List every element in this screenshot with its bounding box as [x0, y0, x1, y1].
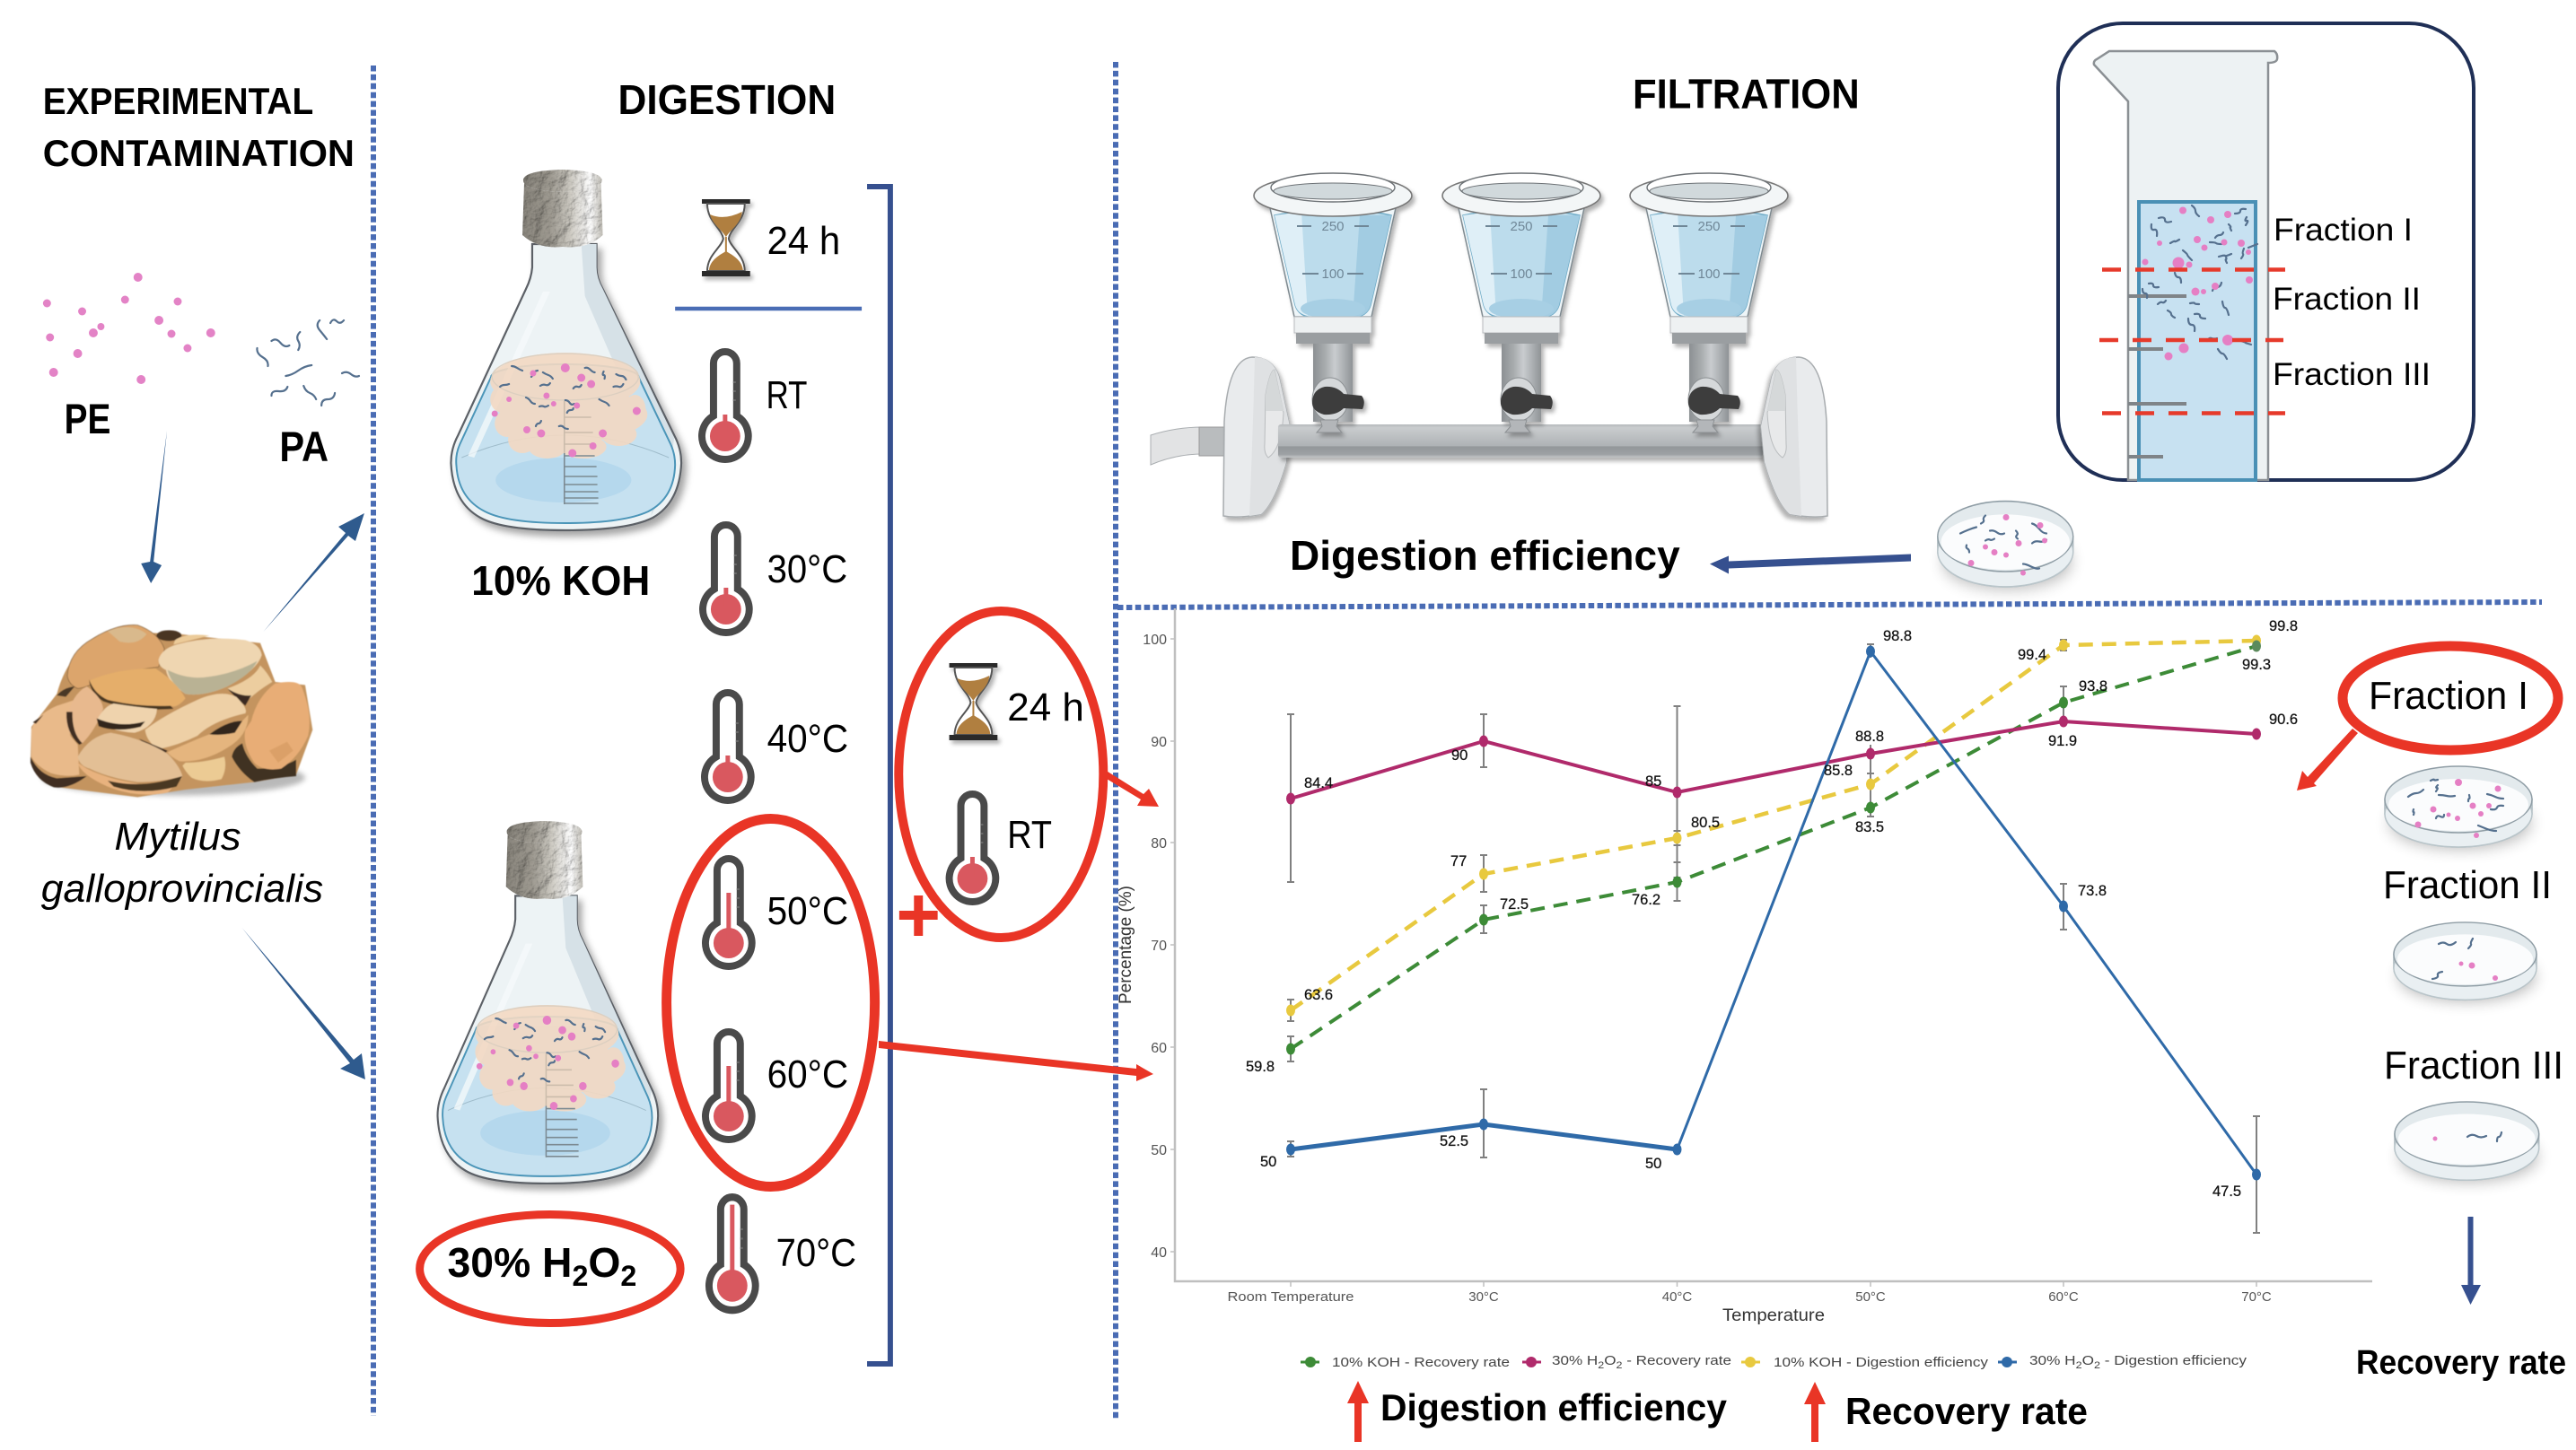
legend: O [2082, 1353, 2094, 1368]
data labels: 52.5 [1440, 1133, 1468, 1149]
icon: red plus [899, 895, 938, 936]
data labels: 47.5 [2212, 1184, 2241, 1200]
data labels: 91.9 [2048, 733, 2077, 749]
callout: 30% H2O2 ellipse: 30% H [447, 1239, 571, 1286]
divider: digestion and filtration [1113, 62, 1118, 1419]
heading: experimental contamination [43, 80, 355, 174]
data labels: 98.8 [1883, 628, 1912, 644]
label: PE: PE [65, 396, 110, 442]
label: Fraction II: Fraction II [2383, 863, 2552, 907]
temperature: 50 C: 50°C [767, 889, 848, 933]
series: 10% KOH digestion efficiency [1286, 635, 2261, 1016]
data labels: 93.8 [2079, 678, 2107, 694]
label: digestion efficiency: Digestion efficiency [1290, 532, 1680, 579]
image: mussels [31, 625, 312, 797]
funnel 2: 100 [1510, 266, 1533, 282]
callout: Fraction I [2343, 646, 2558, 750]
arrow: particles to mussels [141, 431, 167, 583]
data labels: 50 [1260, 1154, 1276, 1170]
heading: filtration: FILTRATION [1633, 70, 1860, 117]
panel: fractions [2297, 646, 2566, 1382]
arrow: mussels to KOH digestion [263, 513, 364, 632]
x axis ticks and labels: 60°C [2048, 1289, 2079, 1305]
label: Fraction I: Fraction I [2274, 213, 2413, 248]
series: 30% H2O2 recovery rate [1286, 716, 2261, 804]
data labels: 99.4 [2018, 647, 2046, 663]
legend: O [1604, 1353, 1617, 1368]
temperature: 40 C: 40°C [767, 717, 848, 761]
y axis ticks and labels: 40 [1151, 1245, 1167, 1261]
funnel 1 [1254, 173, 1412, 432]
data labels: 85.8 [1824, 763, 1853, 779]
temperature: RT [702, 352, 807, 459]
error bars [1287, 640, 2260, 1233]
funnel 1: 250 [1321, 219, 1345, 234]
legend: 10% KOH - Recovery rate [1332, 1355, 1510, 1370]
funnel 1: 100 [1321, 266, 1345, 282]
label: PA: PA [279, 424, 329, 470]
callout: 30% H2O2 ellipse: 2 [572, 1260, 588, 1292]
fraction cut lines [2099, 269, 2285, 413]
y axis ticks and labels: 50 [1151, 1143, 1167, 1158]
y axis ticks and labels: 70 [1151, 939, 1167, 954]
data labels: 99.3 [2242, 657, 2271, 673]
funnel 3 [1630, 173, 1788, 432]
data labels: 59.8 [1246, 1059, 1275, 1075]
dish: Fraction I [2385, 766, 2532, 848]
arrow: Fraction I to chart [2297, 729, 2358, 791]
data labels: 90.6 [2269, 712, 2298, 728]
temperature: 30 C [703, 525, 847, 633]
legend: 2 [1617, 1360, 1623, 1371]
funnel 2 [1442, 173, 1600, 432]
separator under time [675, 307, 862, 310]
legend [1301, 1353, 2247, 1371]
callout: 24 h RT ellipse: 24 h [1007, 686, 1084, 729]
data labels: 85 [1645, 773, 1661, 790]
data labels: 63.6 [1304, 987, 1333, 1003]
y axis ticks and labels: 90 [1151, 735, 1167, 750]
series: 30% H2O2 digestion efficiency [1286, 646, 2261, 1181]
divider: filtration and chart [1117, 602, 2542, 607]
data labels: 83.5 [1855, 819, 1884, 835]
temperature: 30 C: 30°C [767, 547, 847, 591]
label: digestion efficiency increase: Digestion efficiency [1380, 1386, 1728, 1428]
y axis ticks and labels: 80 [1151, 836, 1167, 852]
funnel 2: 250 [1510, 219, 1533, 234]
temperature: 60 C: 60°C [767, 1053, 848, 1096]
PA fibres [257, 319, 359, 406]
flask: 30% H2O2 [438, 821, 658, 1184]
apparatus: filtration manifold [1151, 173, 1827, 517]
x axis ticks and labels: 70°C [2241, 1289, 2272, 1305]
label: Fraction III: Fraction III [2384, 1044, 2563, 1088]
divider: contamination and digestion [371, 66, 376, 1416]
species name: Mytilus [114, 815, 241, 859]
data labels: 88.8 [1855, 729, 1884, 745]
legend: 10% KOH - Digestion efficiency [1774, 1355, 1989, 1370]
funnel 3: 100 [1697, 266, 1721, 282]
data labels: 50 [1645, 1156, 1661, 1172]
data labels [1246, 618, 2298, 1200]
y axis ticks and labels: 100 [1143, 633, 1167, 648]
label: recovery rate: Recovery rate [2356, 1344, 2566, 1382]
data labels: 84.4 [1304, 775, 1333, 791]
series: 10% KOH recovery rate [1286, 641, 2261, 1055]
temperature: 40 C [705, 693, 848, 800]
data labels: 73.8 [2078, 883, 2107, 899]
axes [1175, 608, 2372, 1281]
temperature: RT: RT [767, 373, 807, 417]
y axis ticks and labels: 60 [1151, 1041, 1167, 1056]
callout: 30% H2O2 ellipse: 2 [620, 1260, 636, 1292]
legend: 2 [2094, 1360, 2100, 1371]
dish: Fraction II [2394, 922, 2537, 1000]
y axis title: Percentage (%) [1117, 886, 1135, 1004]
label: recovery rate increase: Recovery rate [1845, 1390, 2088, 1432]
y axis ticks and labels [1143, 633, 1175, 1261]
fibres and particles [2142, 205, 2257, 361]
legend: - Recovery rate [1623, 1353, 1731, 1368]
temperature: 70 C [709, 1197, 856, 1310]
icon: hourglass [702, 199, 750, 276]
heading: experimental contamination: EXPERIMENTAL [43, 80, 313, 122]
legend: 30% H [2029, 1353, 2070, 1368]
arrow: 24 h RT to chart [1102, 770, 1159, 807]
legend: - Digestion efficiency [2100, 1353, 2247, 1368]
temperature: 70 C: 70°C [776, 1231, 856, 1275]
arrow: mussels to H2O2 digestion [242, 928, 365, 1079]
data labels: 77 [1450, 853, 1467, 869]
dish: Fraction III [2395, 1102, 2539, 1181]
x axis ticks and labels: 30°C [1468, 1289, 1499, 1305]
data labels: 72.5 [1500, 896, 1529, 913]
x axis ticks and labels: 40°C [1662, 1289, 1692, 1305]
chart: percentage by temperature [1117, 608, 2372, 1371]
callout: 24 h RT ellipse: RT [1007, 813, 1052, 857]
flask: 10% KOH [451, 170, 681, 530]
legend: 2 [1598, 1360, 1604, 1371]
arrow: 50-60 C to chart [879, 1041, 1153, 1081]
x axis title: Temperature [1722, 1306, 1825, 1325]
x axis ticks and labels: Room Temperature [1228, 1289, 1354, 1305]
text: 24 h: 24 h [767, 219, 840, 263]
data labels: 80.5 [1691, 815, 1720, 831]
panel: experimental contamination [31, 80, 365, 1079]
inset: graduated cylinder fractions [2058, 23, 2474, 480]
callout: 30% H2O2 ellipse: O [588, 1239, 620, 1286]
panel: chart conclusions [1347, 1381, 2088, 1442]
data labels: 76.2 [1632, 892, 1660, 908]
heading: experimental contamination: CONTAMINATION [43, 132, 355, 174]
arrow: recovery rate up [1804, 1382, 1826, 1442]
arrow: fractions to recovery rate [2461, 1217, 2481, 1305]
panel: filtration [1151, 23, 2474, 588]
legend: 30% H [1552, 1353, 1592, 1368]
x axis ticks and labels: 50°C [1855, 1289, 1886, 1305]
species name: galloprovincialis [41, 867, 323, 911]
legend: 2 [2076, 1360, 2082, 1371]
label: Fraction III: Fraction III [2273, 357, 2431, 392]
PE particles [43, 273, 215, 384]
species name [41, 815, 323, 911]
temperature: 50 C [705, 859, 848, 966]
x axis ticks and labels [1228, 1281, 2272, 1305]
callout: 24 h RT ellipse [898, 611, 1103, 938]
icon: petri dish digestion [1938, 502, 2073, 588]
bracket [867, 187, 890, 1364]
heading: digestion: DIGESTION [618, 76, 836, 123]
label: Fraction II: Fraction II [2273, 282, 2421, 317]
callout: 50-60 C ellipse [667, 818, 875, 1186]
data labels: 99.8 [2269, 618, 2298, 634]
arrow: digestion efficiency up [1347, 1381, 1369, 1442]
temperature: 60 C [705, 1032, 848, 1140]
callout: Fraction I: Fraction I [2369, 674, 2528, 718]
panel: digestion [420, 76, 1103, 1364]
label: 10% KOH: 10% KOH [471, 557, 650, 604]
data labels: 90 [1451, 747, 1468, 764]
callout: 30% H2O2 ellipse [420, 1215, 680, 1323]
funnel 3: 250 [1697, 219, 1721, 234]
arrow: dish to digestion efficiency [1710, 555, 1911, 574]
